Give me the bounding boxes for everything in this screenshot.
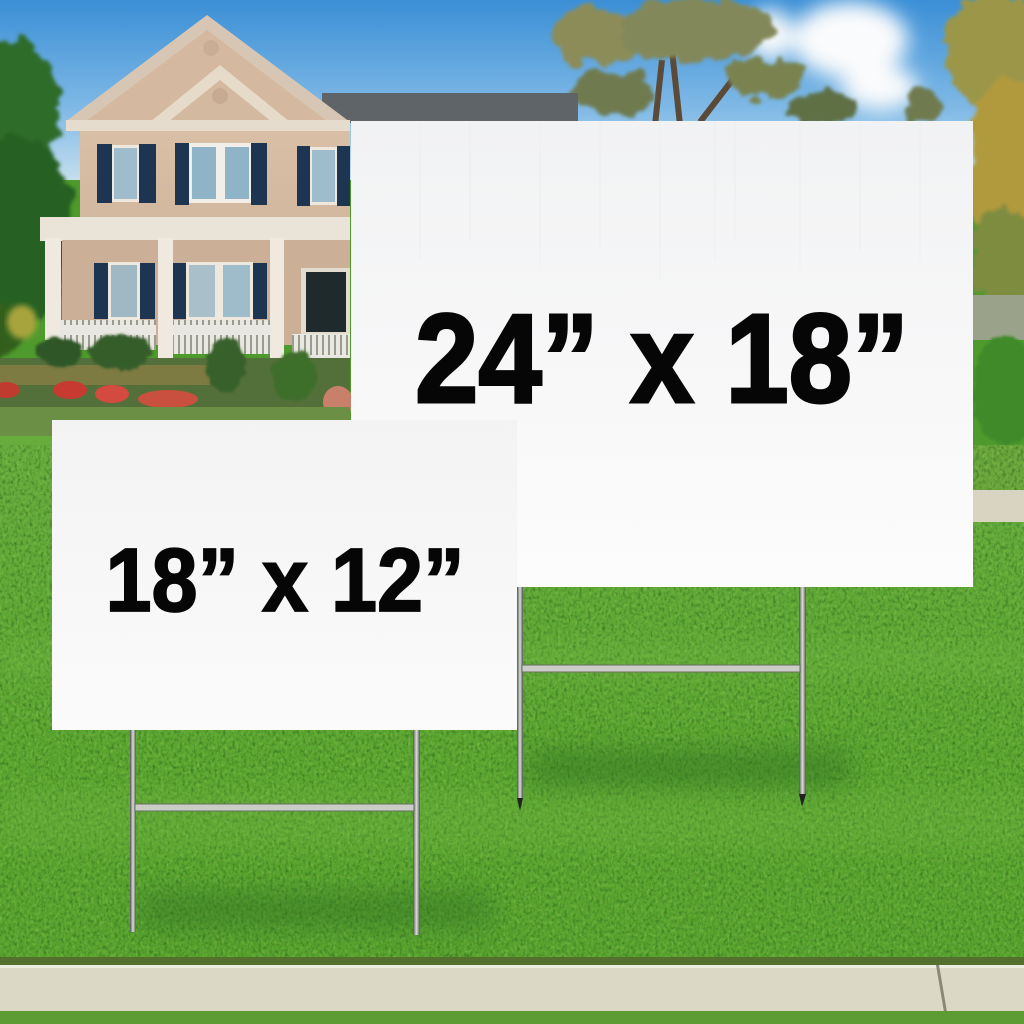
background: right hedge	[973, 335, 1024, 445]
size label: 24 x 18: 24” x 18”	[415, 288, 909, 429]
curb edge	[0, 957, 1024, 965]
rear roof	[322, 93, 578, 123]
house	[40, 15, 578, 360]
background: trees	[0, 0, 1024, 360]
path on right	[973, 490, 1024, 522]
small sign stake	[130, 730, 420, 935]
left tree	[0, 37, 72, 360]
railing	[60, 320, 156, 350]
mowing bands	[0, 640, 1024, 680]
right tree	[945, 0, 1024, 305]
small sign	[52, 420, 517, 730]
sidewalk	[0, 965, 1024, 1012]
lawn	[0, 436, 1024, 964]
bottom grass strip	[0, 1011, 1024, 1024]
large sign	[351, 121, 973, 587]
background: sky	[0, 0, 1024, 180]
sign shadows on lawn	[140, 750, 850, 927]
centre tree trunk	[655, 50, 740, 125]
large sign stake	[517, 587, 806, 811]
shrubs and flower beds	[0, 334, 353, 440]
windows	[94, 143, 350, 334]
size label: 18 x 12: 18” x 12”	[106, 531, 464, 631]
background: clouds	[748, 2, 918, 110]
